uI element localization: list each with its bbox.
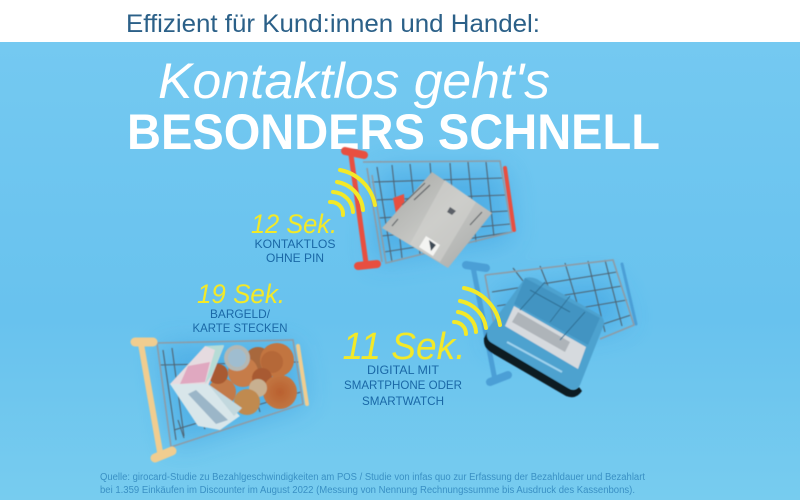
source note: bei 1.359 Einkäufen im Discounter im August 2022 (Messung von Nennung Rechnungssumme bis Ausdruck des Kassenbons). [100, 485, 635, 496]
label: 12 seconds contactless: OHNE PIN [266, 251, 324, 265]
label: 12 seconds contactless: KONTAKTLOS [254, 237, 336, 251]
source note [100, 472, 645, 496]
label: 19 seconds cash: BARGELD/ [210, 307, 271, 321]
banknotes [170, 345, 242, 430]
contactless waves 1 [330, 170, 375, 215]
cart: contactless card [345, 151, 514, 268]
soft cart shadows [160, 170, 630, 448]
title: BESONDERS SCHNELL [127, 104, 660, 160]
blue handle [466, 264, 636, 382]
heading: Effizient für Kund:innen und Handel: [126, 10, 540, 38]
label: 12 seconds contactless [251, 209, 337, 265]
label: 11 seconds digital: SMARTWATCH [362, 394, 444, 408]
cart: smartphone [466, 260, 636, 397]
label: 11 seconds digital: DIGITAL MIT [367, 363, 440, 377]
label: 19 seconds cash: 19 Sek. [197, 279, 285, 309]
header band [0, 0, 800, 42]
label: 11 seconds digital [342, 326, 466, 408]
source note: Quelle: girocard-Studie zu Bezahlgeschwindigkeiten am POS / Studie von infas quo zur Erfassung der Bezahldauer und Bezahlart [100, 472, 645, 483]
coins [208, 343, 297, 415]
smartphone device [484, 277, 604, 397]
label: 12 seconds contactless: 12 Sek. [251, 209, 337, 239]
label: 11 seconds digital: SMARTPHONE ODER [344, 378, 462, 392]
title [127, 53, 660, 160]
title: Kontaktlos geht's [158, 53, 550, 109]
contactless waves 2 [454, 288, 500, 334]
bank card [382, 172, 492, 268]
cart: cash and coins [135, 340, 307, 458]
label: 19 seconds cash [192, 279, 288, 335]
red handle [345, 151, 514, 266]
label: 19 seconds cash: KARTE STECKEN [192, 321, 288, 335]
label: 11 seconds digital: 11 Sek. [342, 326, 466, 368]
cream handle [135, 342, 307, 458]
